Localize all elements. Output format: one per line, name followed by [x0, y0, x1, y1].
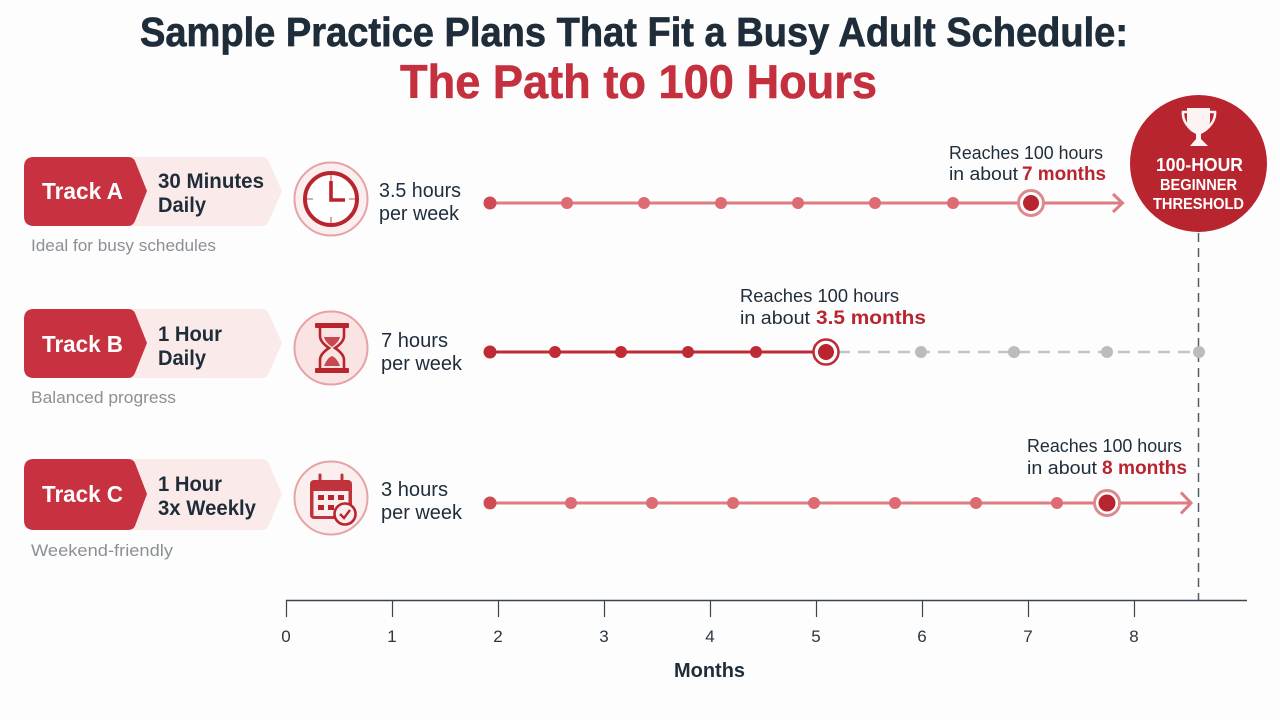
track B callout: in about	[740, 308, 810, 328]
track B callout	[740, 286, 926, 329]
track B badge: Track B	[42, 331, 123, 357]
track C badge: Track C	[42, 481, 123, 507]
track C badge: 3x Weekly	[158, 497, 256, 520]
track A weekly hours: 3.5 hours	[379, 180, 461, 202]
threshold badge	[1130, 95, 1267, 232]
months axis	[281, 600, 1247, 682]
icon: calendar	[294, 462, 368, 534]
track B note: Balanced progress	[31, 388, 176, 407]
threshold badge: THRESHOLD	[1153, 196, 1244, 213]
track B weekly hours: per week	[381, 353, 463, 375]
track C callout	[1027, 436, 1187, 479]
panel: track B	[24, 286, 1205, 407]
months axis: 2	[493, 627, 503, 646]
track B weekly hours	[381, 330, 463, 375]
track C note: Weekend-friendly	[31, 541, 174, 560]
track A weekly hours	[379, 180, 461, 225]
months axis: 3	[599, 627, 609, 646]
icon: trophy	[1183, 108, 1215, 146]
track A badge: 30 Minutes	[158, 170, 264, 193]
icon: clock	[294, 162, 368, 236]
axis title: Months	[674, 660, 745, 682]
track A badge: Daily	[158, 194, 206, 217]
track C callout: in about	[1027, 458, 1097, 478]
months axis: 8	[1129, 627, 1139, 646]
track B badge: Daily	[158, 347, 206, 370]
title: The Path to 100 Hours	[400, 55, 877, 108]
months axis: 5	[811, 627, 821, 646]
track C weekly hours: 3 hours	[381, 479, 448, 501]
threshold dashed line	[1198, 233, 1200, 600]
track A callout: 7 months	[1022, 164, 1106, 185]
track A weekly hours: per week	[379, 203, 460, 225]
track C timeline	[484, 490, 1191, 516]
icon: hourglass	[294, 312, 368, 384]
track A callout: in about	[949, 164, 1018, 184]
months axis: 4	[705, 627, 715, 646]
track C weekly hours	[381, 479, 463, 524]
threshold badge: 100-HOUR	[1156, 155, 1243, 175]
title	[140, 9, 1128, 108]
track B callout: Reaches 100 hours	[740, 286, 899, 306]
track B callout: 3.5 months	[816, 308, 926, 329]
track B weekly hours: 7 hours	[381, 330, 448, 352]
threshold badge: BEGINNER	[1160, 177, 1237, 194]
panel: track A	[24, 143, 1122, 255]
track C badge	[24, 459, 282, 530]
track A badge: Track A	[42, 178, 123, 204]
track A timeline	[484, 190, 1122, 216]
track C badge: 1 Hour	[158, 473, 222, 496]
panel: track C	[24, 436, 1191, 560]
months axis: 0	[281, 627, 291, 646]
title: Sample Practice Plans That Fit a Busy Adult Schedule:	[140, 9, 1128, 55]
track B timeline	[484, 340, 1205, 364]
track C callout: Reaches 100 hours	[1027, 436, 1182, 456]
track A callout	[949, 143, 1106, 185]
months axis: 7	[1023, 627, 1033, 646]
track C weekly hours: per week	[381, 502, 463, 524]
months axis: 6	[917, 627, 927, 646]
track A callout: Reaches 100 hours	[949, 143, 1103, 163]
months axis: 1	[387, 627, 397, 646]
track B badge	[24, 309, 282, 378]
track B badge: 1 Hour	[158, 323, 222, 346]
track C callout: 8 months	[1102, 458, 1187, 479]
track A badge	[24, 157, 282, 226]
track A note: Ideal for busy schedules	[31, 236, 216, 255]
